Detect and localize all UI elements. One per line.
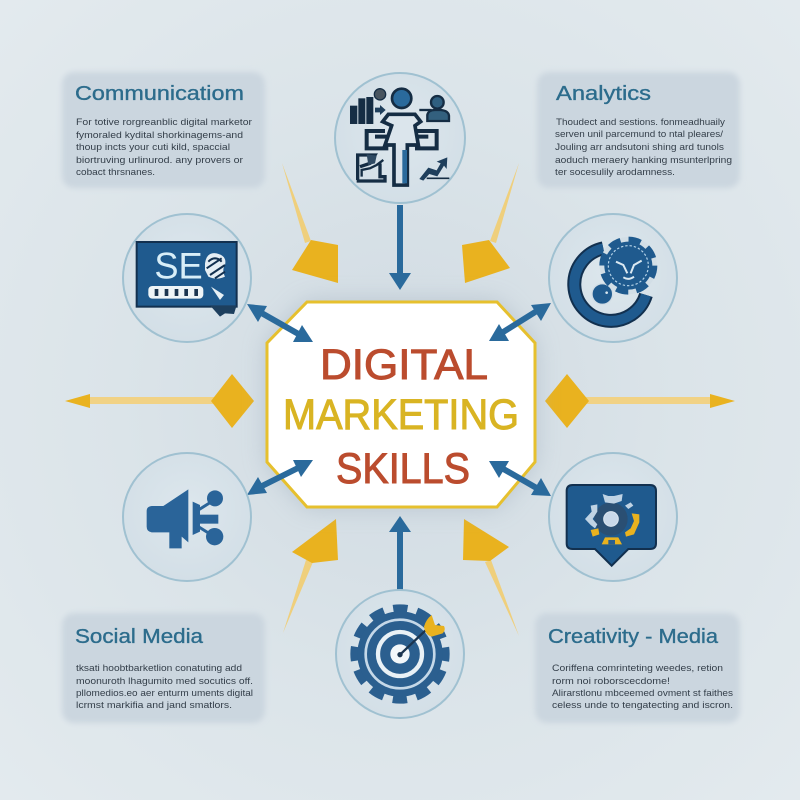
text block: analytics — [555, 117, 732, 178]
arrow: bottom to center — [389, 516, 411, 591]
arrow: lower right double — [489, 461, 551, 496]
arrow: upper right double — [489, 303, 551, 341]
heading: analytics: Analytics — [556, 83, 651, 105]
text block: communication: cobact thrsnanes. — [76, 167, 155, 178]
title: digital: DIGITAL — [320, 341, 488, 389]
panel: communication — [62, 72, 265, 188]
text block: social media: moonuroth lhagumito med socutics off. — [76, 676, 253, 687]
icon: ring and lion gear — [574, 237, 657, 321]
panel: social media — [62, 613, 265, 723]
text block: social media: lcrmst markifia and jand smatlors. — [76, 700, 232, 711]
text block: analytics: ter socesulily arodamness. — [555, 167, 675, 178]
icon: target gear — [355, 609, 445, 699]
node: top skills icon — [335, 73, 465, 203]
text block: communication: For totive rorgreanblic digital marketor — [76, 117, 252, 128]
yellow burst: upper left — [282, 163, 338, 283]
arrow: right yellow — [545, 374, 735, 428]
icon: megaphone — [147, 489, 223, 548]
text block: analytics: Jouling arr andsutoni shing ard tunols — [555, 142, 724, 153]
icon: speech bubble with gear — [567, 485, 656, 566]
node: analytics icon — [549, 214, 677, 342]
text block: creativity media — [552, 663, 733, 711]
node: seo icon — [123, 214, 251, 342]
text block: communication: biortruving urlinurod. any provers or — [76, 155, 243, 166]
panel: analytics — [537, 72, 740, 188]
node: target gear icon — [336, 590, 464, 718]
center box: digital marketing skills — [267, 302, 535, 507]
title: marketing: MARKETING — [283, 391, 519, 439]
text block: analytics: Thoudect and sestions. fonmeadhuaily — [556, 117, 725, 128]
arrow: upper left double — [247, 304, 313, 342]
icon: person with charts — [350, 89, 449, 185]
text block: creativity media: rorm noi roborscecdome! — [552, 676, 670, 687]
text block: analytics: aoduch meraery hanking msunterlpring — [555, 155, 732, 166]
text block: social media — [76, 663, 253, 711]
arrow: top to center — [389, 205, 411, 290]
text block: social media: pllomedios.eo aer enturm uments digital — [76, 688, 253, 699]
text block: social media: tksati hoobtbarketlion conatuting add — [76, 663, 242, 674]
heading: social media: Social Media — [75, 626, 204, 648]
text block: communication — [76, 117, 252, 178]
arrow: left yellow — [65, 374, 254, 428]
text block: creativity media: Coriffena comrinteting weedes, retion — [552, 663, 723, 674]
yellow burst: lower right — [463, 519, 519, 636]
text block: creativity media: Alirarstlonu mbceemed ovment st faithes — [552, 688, 733, 699]
arrow: lower left double — [247, 460, 313, 495]
title: skills: SKILLS — [336, 445, 470, 493]
icon: seo screen: SE — [154, 244, 203, 286]
text block: communication: thoup incts your cuti kild, spaccial — [76, 142, 230, 153]
node: creative gear bubble icon — [549, 453, 677, 581]
central shadow — [267, 302, 535, 507]
text block: communication: fymoraled kydital shorkinagems-and — [76, 130, 243, 141]
heading: communication: Communicatiom — [75, 83, 244, 105]
heading: creativity media: Creativity - Media — [548, 626, 719, 648]
node: social megaphone icon — [123, 453, 251, 581]
text block: analytics: serven unil parcemund to ntal pleares/ — [555, 129, 723, 140]
yellow burst: upper right — [462, 163, 519, 283]
panel: creativity media — [535, 613, 740, 723]
yellow burst: lower left — [283, 519, 338, 633]
text block: creativity media: celess unde to tengatecting and iscron. — [552, 700, 733, 711]
